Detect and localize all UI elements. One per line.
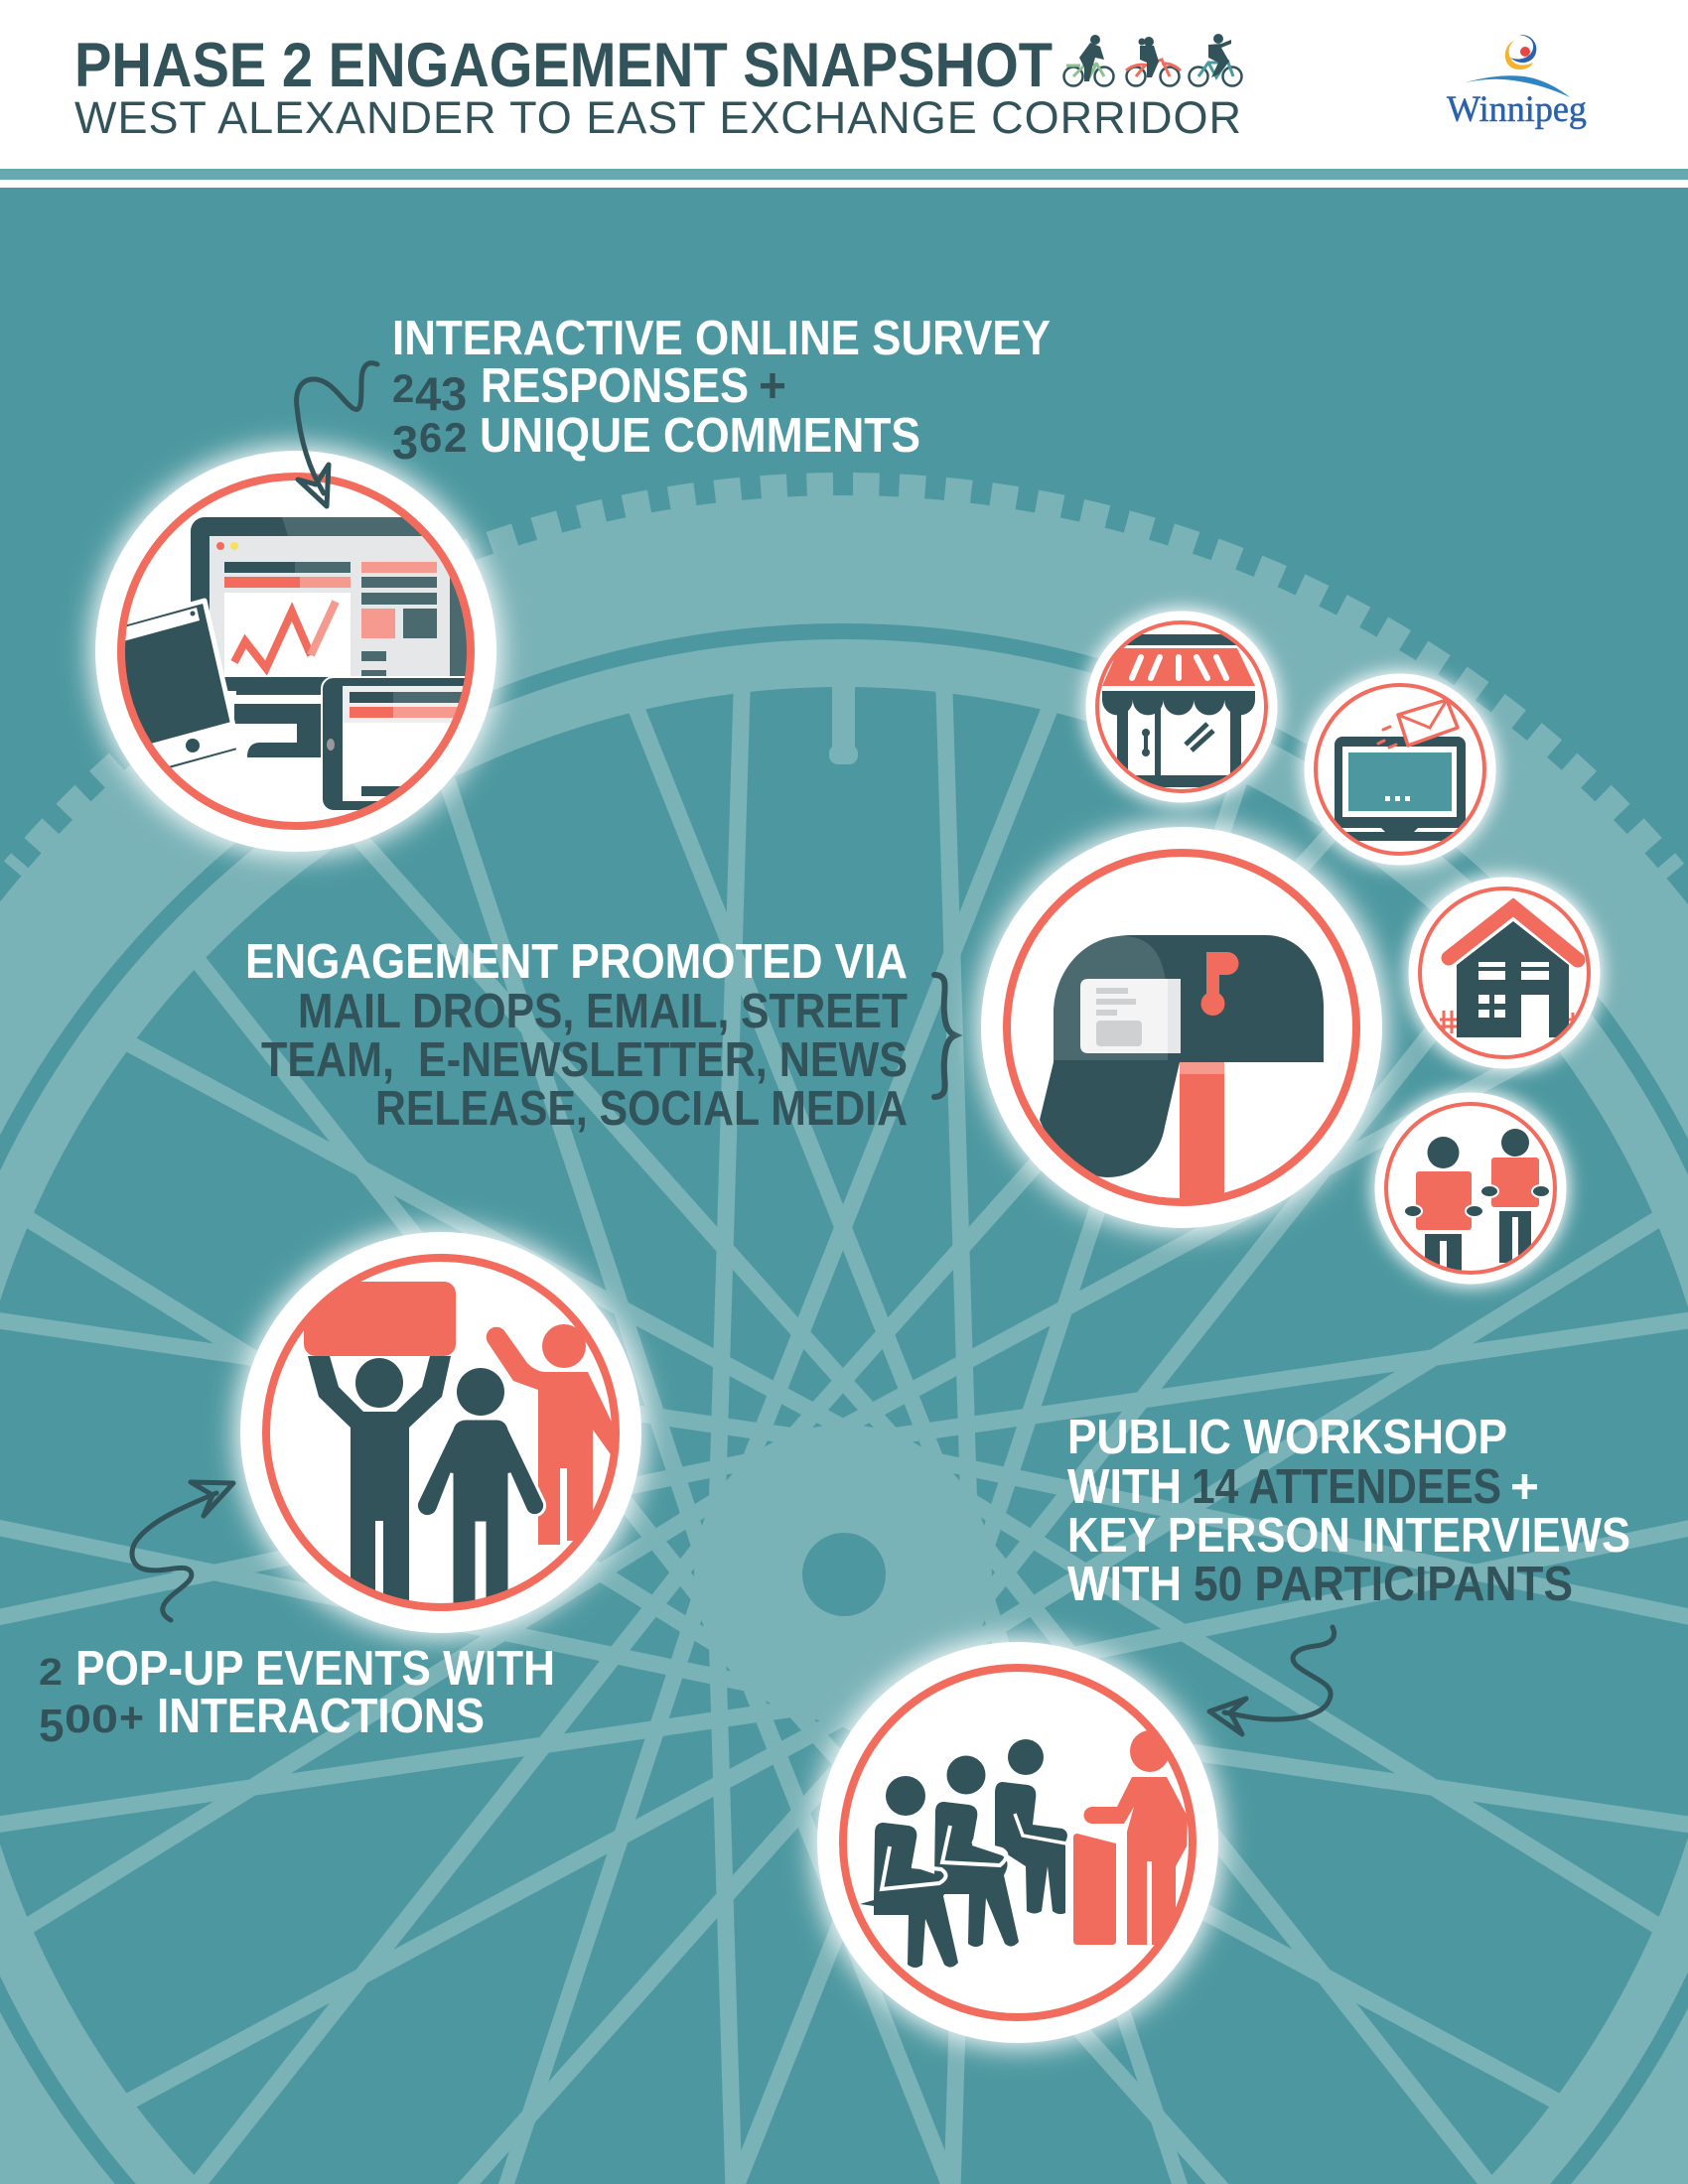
- survey text: 6: [419, 414, 442, 461]
- survey text: [392, 312, 1051, 469]
- logo: Winnipeg: [1447, 35, 1587, 130]
- pop-up events text: [39, 1642, 555, 1751]
- panel: workshop circle: [813, 1638, 1222, 2047]
- panel: street team circle: [1372, 1090, 1569, 1287]
- title: PHASE 2 ENGAGEMENT SNAPSHOT: [74, 31, 1053, 100]
- workshop text: PUBLIC WORKSHOP: [1067, 1411, 1507, 1464]
- arrow: to workshop circle: [1209, 1627, 1335, 1734]
- bicycle wheel background: [0, 484, 1688, 2184]
- workshop text: WITH: [1067, 1558, 1182, 1611]
- icon: mailbox: [1040, 935, 1324, 1211]
- pop-up events text: 5: [39, 1700, 65, 1751]
- pop-up events text: +: [119, 1694, 144, 1742]
- icon: street team: [1404, 1129, 1550, 1281]
- pop-up events text: 00: [65, 1698, 118, 1741]
- icon: devices: [125, 517, 467, 810]
- panel: storefront circle: [1083, 609, 1280, 805]
- promotion text: TEAM, E-NEWSLETTER, NEWS: [261, 1033, 908, 1087]
- icon: three cyclists: [1064, 34, 1241, 85]
- panel: pop-up events circle: [236, 1228, 645, 1637]
- workshop text: 50 PARTICIPANTS: [1194, 1558, 1573, 1611]
- workshop text: 14 ATTENDEES: [1192, 1460, 1501, 1514]
- panel: house circle: [1406, 875, 1603, 1071]
- header background: [0, 0, 1688, 169]
- promotion text: [245, 935, 908, 1136]
- subtitle: WEST ALEXANDER TO EAST EXCHANGE CORRIDOR: [74, 92, 1241, 143]
- survey text: 2: [392, 367, 414, 411]
- pop-up events text: 2: [39, 1652, 63, 1694]
- survey text: INTERACTIVE ONLINE SURVEY: [392, 312, 1051, 365]
- workshop text: KEY PERSON INTERVIEWS: [1067, 1509, 1630, 1563]
- pop-up events text: POP-UP EVENTS WITH: [75, 1642, 555, 1696]
- logo: Winnipeg: Winnipeg: [1447, 89, 1587, 130]
- survey text: RESPONSES: [481, 359, 749, 413]
- icon: seated audience and speaker: [860, 1730, 1188, 1968]
- workshop text: +: [1510, 1460, 1539, 1514]
- pop-up events text: INTERACTIONS: [157, 1690, 485, 1743]
- survey text: 2: [444, 414, 467, 461]
- icon: monitor and envelope: [1331, 700, 1470, 841]
- panel: mailbox circle: [977, 823, 1386, 1232]
- icon: house: [1440, 907, 1584, 1037]
- survey text: +: [759, 359, 786, 413]
- workshop text: [1067, 1411, 1630, 1611]
- arrow: to pop-up circle: [132, 1482, 233, 1620]
- survey text: UNIQUE COMMENTS: [480, 409, 920, 463]
- panel: email circle: [1302, 671, 1498, 868]
- survey text: 3: [392, 416, 418, 469]
- promotion text: RELEASE, SOCIAL MEDIA: [375, 1082, 908, 1136]
- header rule: [0, 169, 1688, 180]
- icon: pop-up crowd: [304, 1282, 618, 1613]
- survey text: 43: [415, 367, 467, 420]
- arrow: to survey circle: [297, 363, 377, 506]
- icon: storefront: [1102, 634, 1255, 787]
- promotion text: MAIL DROPS, EMAIL, STREET: [298, 985, 908, 1038]
- panel: online survey circle: [65, 447, 510, 856]
- promotion text: ENGAGEMENT PROMOTED VIA: [245, 935, 908, 989]
- workshop text: WITH: [1067, 1460, 1182, 1514]
- brace: [934, 975, 955, 1097]
